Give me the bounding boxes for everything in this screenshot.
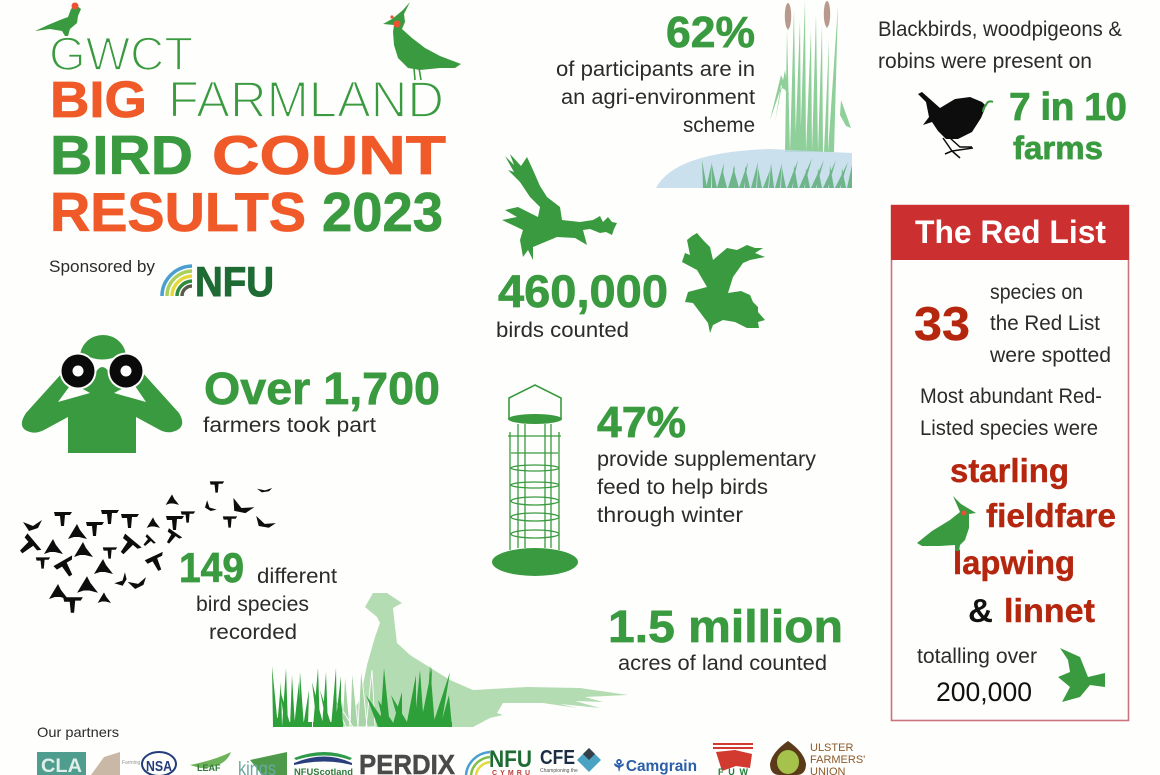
panel heading: The Red List bbox=[915, 214, 1106, 250]
logo: NSA: NSA bbox=[146, 758, 172, 775]
icon: small green bird bbox=[1058, 648, 1105, 702]
logo: NFU Scotland bbox=[294, 752, 353, 775]
logo: Farming and Wildlife: Farming bbox=[122, 760, 141, 766]
stat: 62% agri-environment bbox=[556, 8, 755, 137]
logo: CFE bbox=[540, 747, 601, 774]
partner logos row bbox=[37, 741, 865, 775]
stat: 7 in 10 farms: farms bbox=[1013, 130, 1103, 166]
stat: 1.5 million acres bbox=[608, 601, 843, 675]
text: totalling over 200,000 bbox=[917, 645, 1037, 707]
logo: CFE: Championing the bbox=[540, 768, 578, 774]
stat: 7 in 10 farms bbox=[1009, 86, 1127, 166]
logo: NFU Cymru bbox=[466, 746, 532, 775]
title line: GWCT: GWCT bbox=[49, 27, 193, 80]
icon: bird feeder bbox=[492, 385, 578, 576]
stat: blackbirds text: robins were present on bbox=[878, 50, 1092, 73]
stat: 33 species: the Red List bbox=[990, 312, 1100, 335]
species list: & bbox=[968, 592, 993, 629]
title line: BIRD COUNT bbox=[50, 124, 446, 186]
sponsor: Sponsored by NFU bbox=[49, 257, 274, 305]
species list: linnet bbox=[1004, 592, 1095, 629]
stat: 7 in 10 farms: 7 in 10 bbox=[1009, 86, 1127, 129]
stat: 460,000 birds: birds counted bbox=[496, 319, 629, 342]
stat: 460,000 birds bbox=[496, 266, 668, 342]
stat: 1.5 million acres: acres of land counted bbox=[618, 652, 827, 675]
stat: 33 species: 33 bbox=[914, 297, 970, 350]
stat: 149 bird species bbox=[179, 544, 337, 644]
stat: 47% feed: through winter bbox=[597, 504, 743, 527]
stat: 460,000 birds: 460,000 bbox=[498, 266, 668, 317]
text: totalling over 200,000: totalling over bbox=[917, 645, 1037, 668]
icon: small bird perched on title bbox=[35, 2, 81, 36]
stat: 47% feed bbox=[597, 398, 817, 527]
icon: flock of birds bbox=[15, 481, 276, 613]
logo: Farming and Wildlife bbox=[91, 752, 141, 775]
title line: BIG FARMLAND: FARMLAND bbox=[168, 71, 444, 128]
stat: 62% agri-environment: scheme bbox=[683, 114, 755, 137]
logo: Ulster Farmers' Union: FARMERS' bbox=[810, 754, 865, 766]
icon: lapwing perched on title bbox=[383, 2, 461, 80]
icon: wren with worm bbox=[918, 92, 993, 158]
title line: BIG FARMLAND: BIG bbox=[50, 71, 147, 128]
stat: 62% agri-environment: of participants are in bbox=[556, 58, 755, 81]
text: most abundant: Most abundant Red- bbox=[920, 385, 1102, 408]
stat: 47% feed: provide supplementary bbox=[597, 448, 817, 471]
icon: flying bird one bbox=[502, 154, 617, 260]
title line: BIRD COUNT: BIRD bbox=[50, 124, 193, 186]
logo: Camgrain: ⚘Camgrain bbox=[612, 758, 697, 775]
logo: LEAF bbox=[190, 752, 231, 773]
panel heading bbox=[891, 205, 1129, 260]
title line: RESULTS 2023 bbox=[50, 181, 443, 243]
partners heading: Our partners bbox=[37, 724, 119, 740]
sponsor: Sponsored by NFU: Sponsored by bbox=[49, 257, 156, 276]
icon: small lapwing bbox=[917, 496, 976, 551]
title line: BIG FARMLAND bbox=[50, 71, 444, 128]
icon: NFU rainbow bbox=[162, 266, 192, 296]
logo: CFE: CFE bbox=[540, 747, 575, 769]
stat: 149 bird species: different bbox=[257, 565, 337, 588]
stat: 149 bird species: 149 bbox=[179, 544, 244, 591]
text: most abundant bbox=[920, 385, 1102, 440]
text: totalling over 200,000: 200,000 bbox=[936, 677, 1032, 707]
title line: BIRD COUNT: COUNT bbox=[212, 124, 446, 186]
title block bbox=[49, 27, 446, 243]
stat: over 1,700 farmers: Over 1,700 bbox=[204, 363, 440, 414]
stat: over 1,700 farmers bbox=[203, 363, 440, 437]
icon: reeds and pond bbox=[656, 0, 852, 188]
species list: starling bbox=[950, 452, 1069, 489]
logo: Kings bbox=[238, 752, 287, 775]
icon: person with binoculars bbox=[22, 335, 182, 453]
logo: CLA bbox=[37, 752, 86, 775]
logo: Ulster Farmers' Union bbox=[770, 741, 865, 775]
stat: 149 bird species: bird species bbox=[196, 593, 309, 616]
panel: the red list bbox=[891, 205, 1129, 720]
icon: flying bird two bbox=[682, 233, 765, 333]
icon: pheasant in grass bbox=[272, 593, 628, 727]
sponsor: Sponsored by NFU: NFU bbox=[195, 258, 274, 305]
stat: 33 species bbox=[914, 281, 1111, 367]
species list: fieldfare bbox=[986, 497, 1116, 534]
logo: Ulster Farmers' Union: ULSTER bbox=[810, 742, 853, 754]
species list: lapwing bbox=[953, 544, 1075, 581]
stat: 149 bird species: recorded bbox=[209, 621, 297, 644]
stat: 62% agri-environment: an agri-environment bbox=[561, 86, 755, 109]
text: most abundant: Listed species were bbox=[920, 417, 1098, 440]
stat: 62% agri-environment: 62% bbox=[666, 8, 755, 57]
stat: blackbirds text bbox=[878, 18, 1122, 73]
stat: over 1,700 farmers: farmers took part bbox=[203, 414, 376, 437]
logo: NSA bbox=[142, 752, 176, 775]
logo: LEAF: LEAF bbox=[197, 763, 221, 773]
stat: 47% feed: feed to help birds bbox=[597, 476, 768, 499]
stat: 33 species: were spotted bbox=[989, 344, 1111, 367]
title line: RESULTS 2023: RESULTS bbox=[50, 181, 306, 243]
title line: RESULTS 2023: 2023 bbox=[322, 181, 443, 243]
species list bbox=[950, 452, 1116, 629]
logo: NFU Cymru: NFU bbox=[489, 746, 532, 773]
stat: 1.5 million acres: 1.5 million bbox=[608, 601, 843, 652]
logo: FUW bbox=[713, 743, 753, 775]
stat: 33 species: species on bbox=[990, 281, 1083, 304]
stat: 47% feed: 47% bbox=[597, 398, 686, 447]
stat: blackbirds text: Blackbirds, woodpigeons & bbox=[878, 18, 1122, 41]
